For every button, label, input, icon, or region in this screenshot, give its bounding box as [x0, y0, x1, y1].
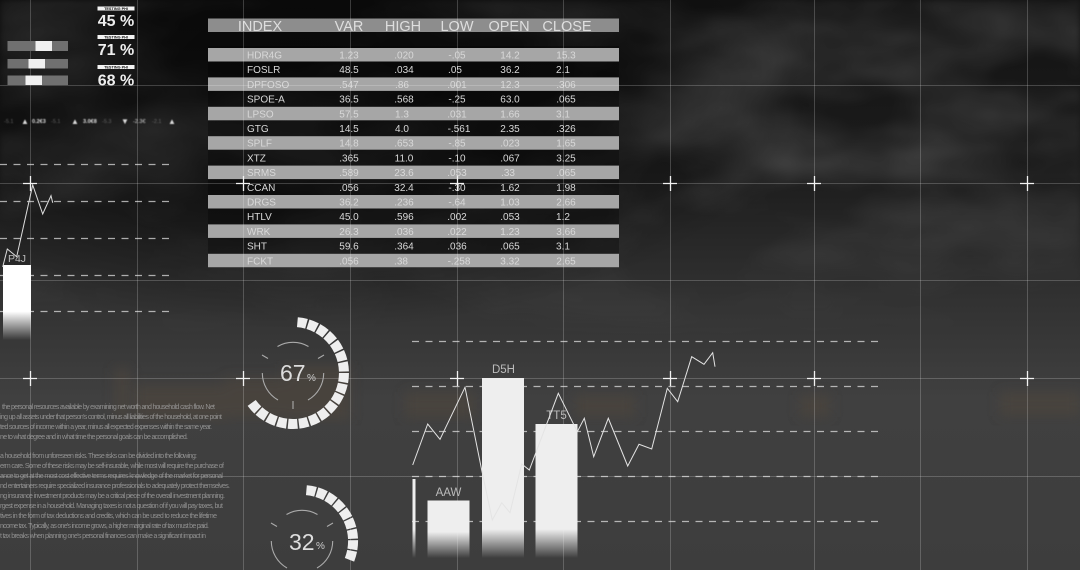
ticker strip [4, 117, 176, 126]
text block: personal finance paragraphs: ncome tax. Typically, as one's income grows, a higher marginal rate of tax must be paid. [0, 523, 209, 530]
ticker strip: 0.2€3 [32, 119, 46, 125]
table rows text: -.64 [448, 198, 466, 208]
table header: INDEX [238, 19, 282, 35]
table rows text: .589 [339, 168, 359, 179]
bar: AAW: AAW [436, 487, 462, 499]
gauge: 32 percent: % [316, 541, 325, 552]
metric 45 percent: 45 % [98, 13, 134, 30]
text block: personal finance paragraphs: ne to what degree and in what time the personal goals can be accomplished. [0, 434, 188, 441]
table rows text: FCKT [247, 256, 273, 267]
table rows text: .002 [447, 212, 467, 223]
table rows text: -.258 [448, 256, 471, 267]
metric 71 percent: TESTING PHI [104, 36, 128, 40]
table rows text: 1.66 [500, 109, 520, 120]
table rows text: -.10 [448, 153, 466, 164]
table rows text: SHT [247, 242, 267, 253]
grid crosshair markers [23, 176, 1034, 386]
table rows text: -.30 [448, 183, 466, 194]
text block: personal finance paragraphs: a household from unforeseen risks. These risks can be divided into the following: [0, 453, 197, 460]
metric 68 percent: TESTING PHI [104, 66, 128, 70]
table rows text: 1.2 [556, 212, 570, 223]
table rows text: 1.03 [500, 198, 520, 208]
left bar chart with sparkline [3, 185, 53, 340]
panel: testing percentages [98, 6, 134, 90]
table rows text: -.561 [448, 124, 471, 135]
table header: CLOSE [542, 19, 592, 35]
gauge: 32 percent [271, 490, 353, 568]
table rows text: -.05 [448, 50, 466, 62]
table rows text: 26.3 [339, 227, 359, 238]
table rows text: GTG [247, 124, 269, 135]
table header [208, 18, 619, 35]
text block: personal finance paragraphs: tives in the form of tax deductions and credits, which can be used to reduce the lifetime [0, 513, 217, 520]
gauge: 32 percent: 32 [289, 529, 315, 555]
table rows text: 14.8 [339, 139, 359, 150]
table rows text: WRK [247, 227, 271, 238]
table rows text: .236 [394, 198, 414, 208]
table rows text: 45.0 [339, 212, 359, 223]
table rows text: HDR4G [247, 50, 282, 62]
bar: D5H [482, 364, 524, 558]
table rows text: -.85 [448, 139, 466, 150]
table rows text: .33 [501, 168, 515, 179]
bar: P4J [3, 253, 31, 340]
table rows text: SPOE-A [247, 95, 285, 106]
ticker strip: -2.1 [152, 119, 161, 125]
table rows text: DRGS [247, 198, 276, 208]
table row bands [208, 48, 619, 267]
table rows text: 1.65 [556, 139, 576, 150]
table rows text: 36.2 [500, 65, 520, 76]
text block: personal finance paragraphs: erm care. Some of these risks may be self-insurable, while most will require the purchase of [0, 463, 224, 470]
bar: P4J: P4J [8, 253, 26, 265]
table rows text: .034 [394, 65, 414, 76]
line chart [413, 353, 715, 520]
ticker strip: -5.1 [4, 119, 13, 125]
table rows text: 1.23 [339, 50, 359, 62]
table rows text: .056 [339, 256, 359, 267]
gauge: 67 percent: 67 [280, 360, 306, 386]
table rows text: 3.66 [556, 227, 576, 238]
table rows text: .001 [447, 80, 467, 91]
table rows text: .031 [447, 109, 467, 120]
table rows text: .065 [556, 168, 576, 179]
table rows text: .036 [394, 227, 414, 238]
text block: personal finance paragraphs [0, 404, 230, 540]
sparkline [3, 185, 53, 267]
table rows text: LPSO [247, 109, 274, 120]
panel: index data table [208, 18, 619, 268]
main bar and line chart [412, 353, 715, 558]
table rows text: .326 [556, 124, 576, 135]
table rows text: 32.4 [394, 183, 414, 194]
table rows text: .065 [500, 242, 520, 253]
table rows text: .547 [339, 80, 359, 91]
metric 45 percent: TESTING PHI [104, 7, 128, 11]
metric 68 percent [98, 65, 134, 90]
table rows text: 2.1 [556, 65, 570, 76]
ticker strip: -5.3 [102, 119, 111, 125]
table rows text: .38 [394, 256, 408, 267]
metric 68 percent: 68 % [98, 72, 134, 90]
table header: HIGH [385, 19, 421, 35]
table rows text [247, 50, 576, 267]
table rows text: 1.62 [500, 183, 520, 194]
table rows text: 1.98 [556, 183, 576, 194]
table rows text: 15.3 [556, 50, 576, 62]
table header: LOW [440, 19, 474, 35]
bar: AAW [428, 487, 470, 558]
table rows text: 1.23 [500, 227, 520, 238]
table rows text: 11.0 [395, 153, 414, 164]
table rows text: 3.1 [556, 242, 570, 253]
gauge: 67 percent: % [307, 373, 316, 384]
table rows text: 2.66 [556, 198, 576, 208]
table rows text: .056 [339, 183, 359, 194]
text block: personal finance paragraphs: ted sources of income within a year, minus all expected expenses within the same year. [0, 424, 212, 431]
table header: VAR [335, 19, 363, 35]
table rows text: .023 [500, 139, 520, 150]
background: blurred city skyline [115, 365, 1080, 420]
table rows text: SRMS [247, 168, 276, 179]
table rows text: .568 [394, 95, 414, 106]
text block: personal finance paragraphs: the personal resources available by examining net worth and household cash flow. Net [2, 404, 215, 411]
bar: TT5 [536, 410, 578, 558]
bar: TT5: TT5 [546, 410, 567, 422]
text block: personal finance paragraphs: nd entertainers require specialized insurance professionals to adequately protect themselves. [0, 483, 230, 490]
table rows text: 14.2 [500, 50, 520, 62]
text block: personal finance paragraphs: ng insurance investment products may be a critical piece of the overall investment planning. [0, 493, 225, 500]
text block: personal finance paragraphs: t tax breaks when planning one's personal finances can make a significant impact in [0, 533, 206, 540]
table rows text: 23.6 [394, 168, 414, 179]
text block: personal finance paragraphs: ance to get at the most cost effective terms requires knowledge of the market for personal [0, 473, 223, 480]
gauge segments [306, 490, 353, 561]
table rows text: 4.0 [395, 124, 409, 135]
text block: personal finance paragraphs: ing up all assets under that person's control, minus all liabilities of the household, at one point [0, 414, 222, 421]
table rows text: 3.25 [556, 153, 576, 164]
table rows text: .053 [500, 212, 520, 223]
table rows text: .365 [339, 153, 359, 164]
table rows text: 48.5 [339, 65, 359, 76]
table rows text: .05 [448, 65, 462, 76]
table rows text: CCAN [247, 183, 275, 194]
bar: D5H: D5H [492, 364, 515, 376]
text block: personal finance paragraphs: rgest expense in a household. Managing taxes is not a question of if you will pay taxes, but [0, 503, 223, 510]
table rows text: 2.65 [556, 256, 576, 267]
table rows text: .065 [556, 95, 576, 106]
table rows text: FOSLR [247, 65, 280, 76]
table rows text: 36.2 [339, 198, 359, 208]
thin axis bar [412, 479, 416, 558]
ticker strip: -2.3€ [133, 119, 146, 125]
table rows text: 14.5 [339, 124, 359, 135]
table rows text: -.25 [448, 95, 466, 106]
table rows text: .020 [394, 50, 414, 62]
gauge: 67 percent [251, 322, 344, 424]
table rows text: .86 [395, 80, 409, 91]
gauge segments [251, 322, 344, 424]
panel: slider bars [8, 41, 68, 85]
table rows text: SPLF [247, 139, 272, 150]
table rows text: 59.6 [339, 242, 359, 253]
table rows text: 2.35 [500, 124, 520, 135]
ticker strip: 3.0€8 [83, 119, 97, 125]
ticker strip: -5.1 [51, 119, 60, 125]
ticker strip: ▲ [21, 117, 29, 126]
table rows text: 12.3 [500, 80, 520, 91]
table rows text: XTZ [247, 153, 266, 164]
table rows text: .067 [500, 153, 520, 164]
table rows text: 3.32 [500, 256, 520, 267]
table rows text: .053 [447, 168, 467, 179]
table rows text: DPFOSO [247, 80, 289, 91]
table rows text: HTLV [247, 212, 272, 223]
metric 71 percent [98, 35, 134, 59]
table rows text: 1.3 [395, 109, 409, 120]
table rows text: 3.1 [556, 109, 570, 120]
table rows text: .596 [394, 212, 414, 223]
ticker strip: ▼ [121, 117, 129, 126]
table rows text: 36.5 [339, 95, 359, 106]
table rows text: .653 [394, 139, 414, 150]
table header: OPEN [488, 19, 530, 35]
table rows text: 57.5 [339, 109, 359, 120]
table rows text: .306 [556, 80, 576, 91]
ticker strip: ▲ [168, 117, 176, 126]
table rows text: .364 [394, 242, 414, 253]
ticker strip: ▲ [71, 117, 79, 126]
metric 71 percent: 71 % [98, 42, 134, 59]
table rows text: .022 [447, 227, 467, 238]
table rows text: 63.0 [500, 95, 520, 106]
table rows text: .036 [447, 242, 467, 253]
